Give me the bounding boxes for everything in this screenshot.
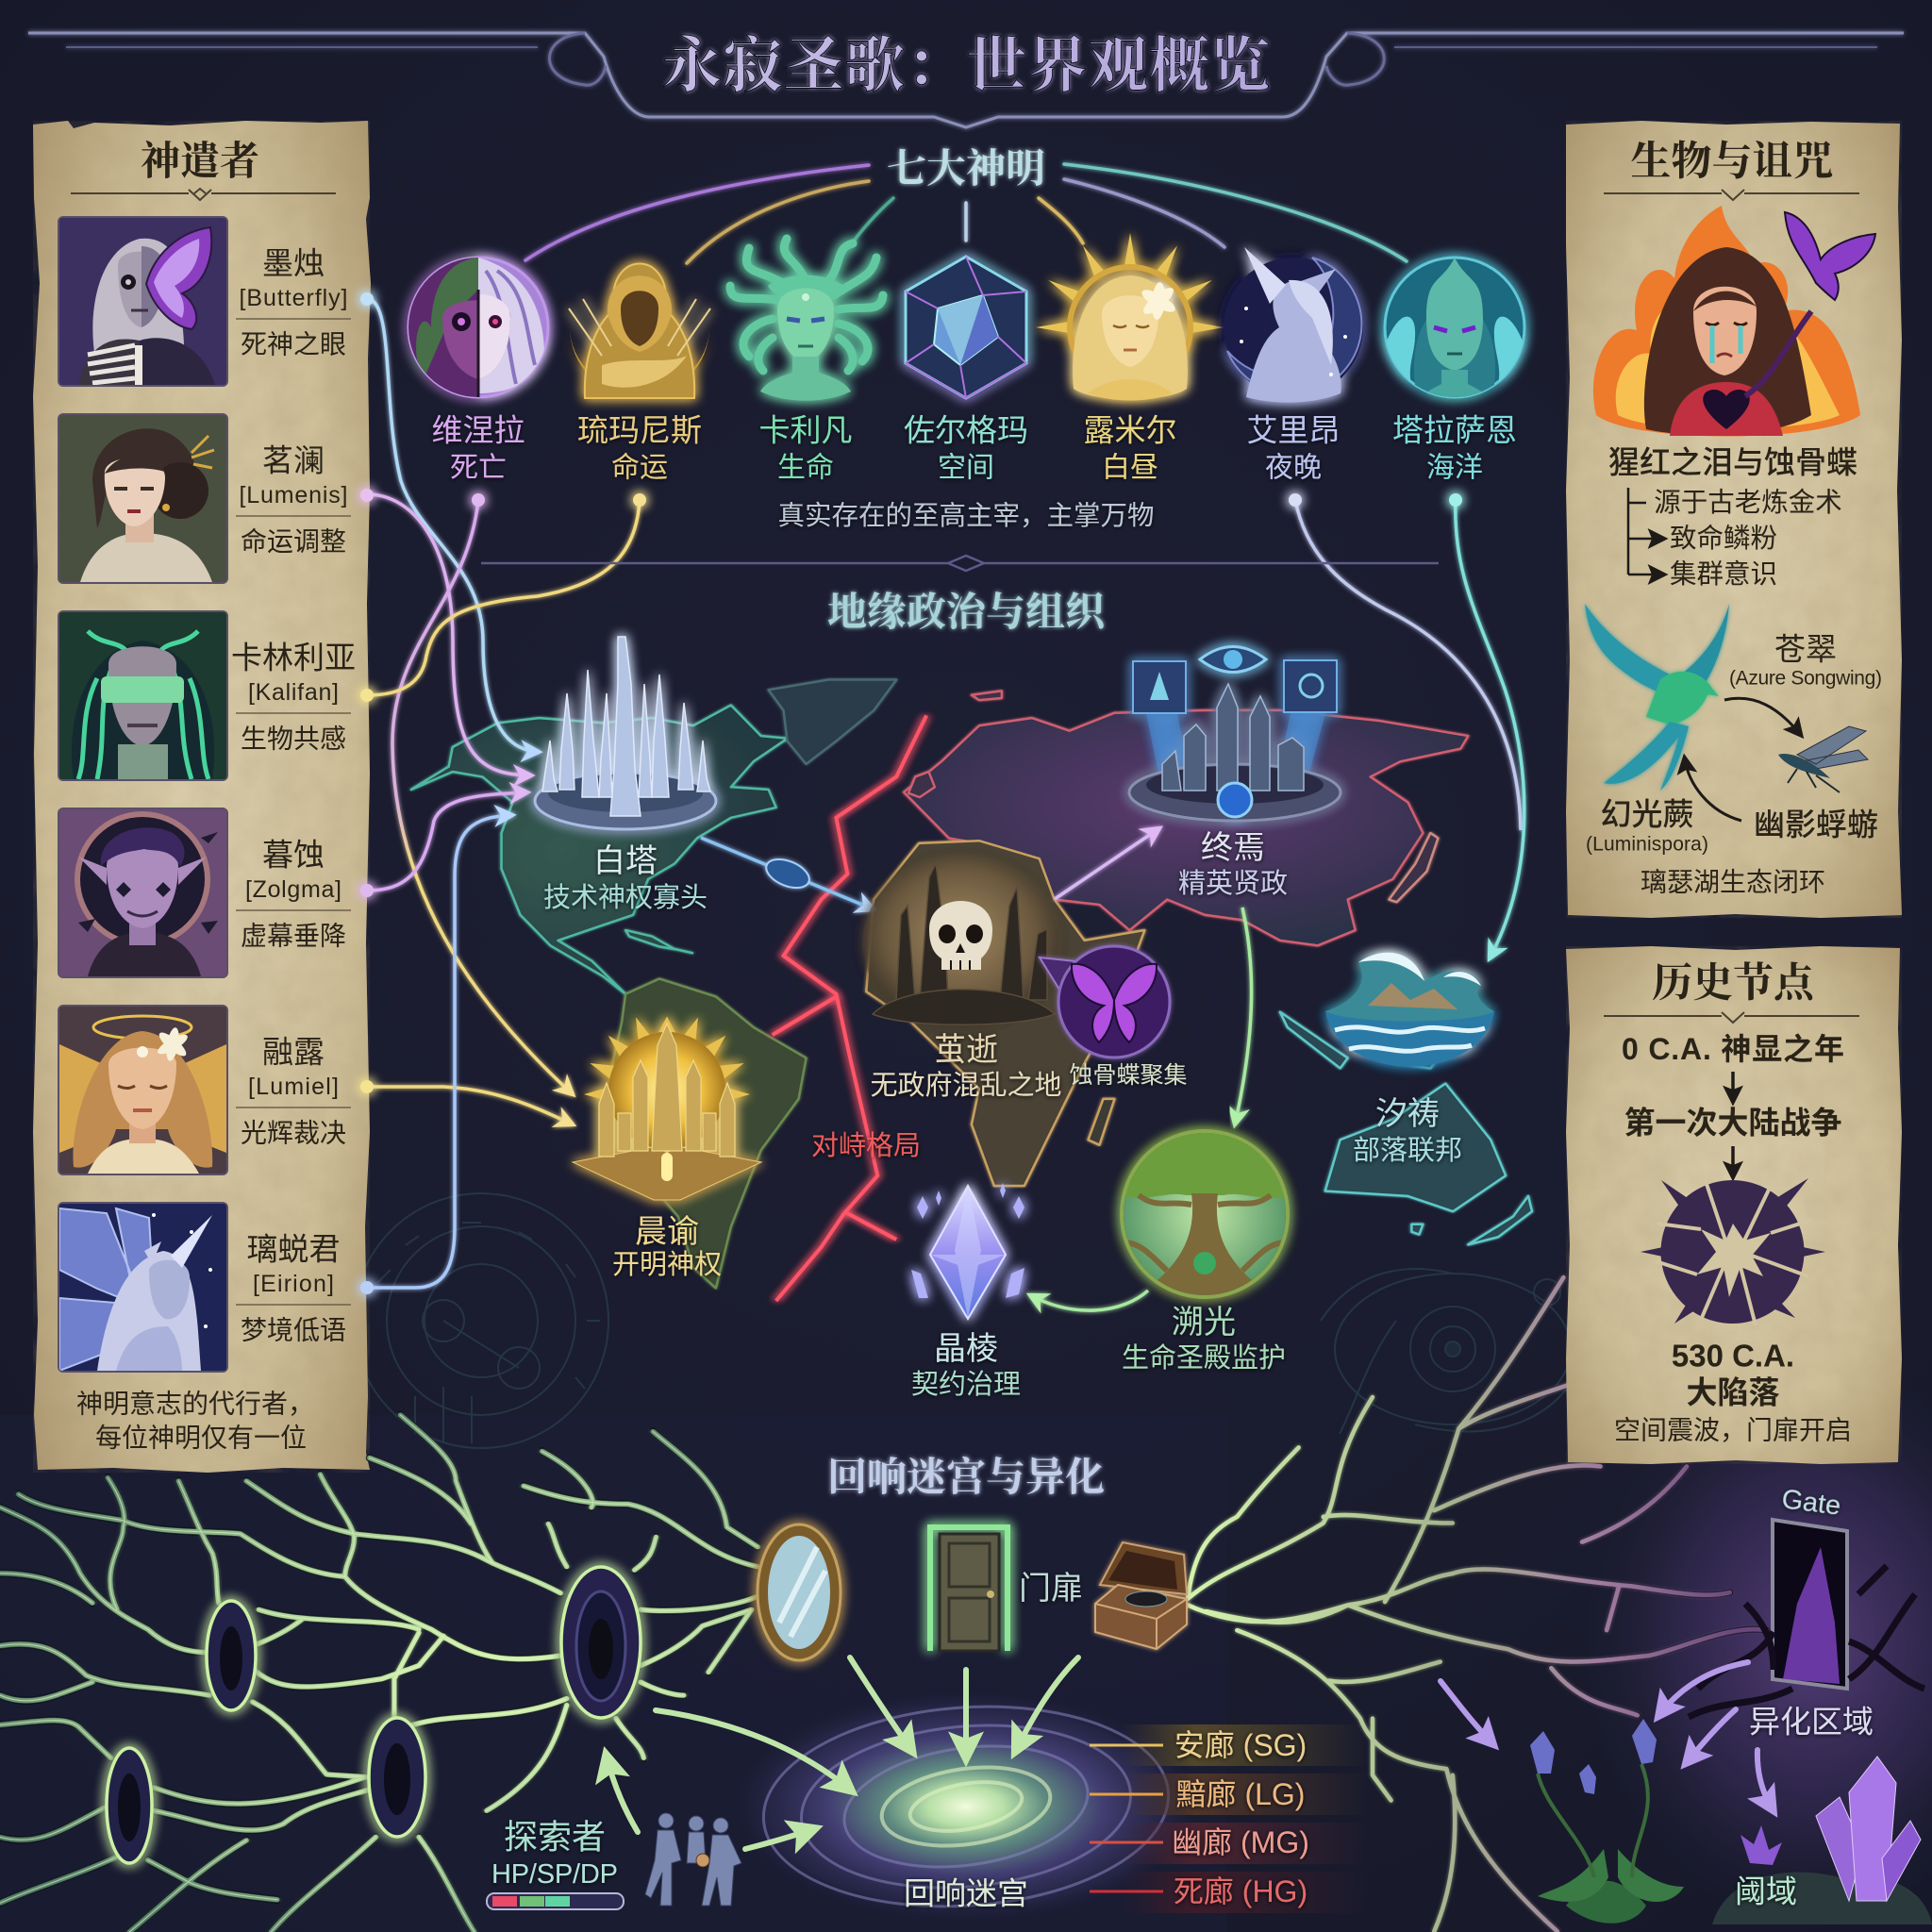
god name: 琉玛尼斯 [577, 413, 702, 447]
god name: 艾里昂 [1247, 413, 1340, 447]
portrait: 融露 [59, 1007, 226, 1174]
callout: butterfly swarm [1040, 946, 1188, 1089]
icon: music box [1095, 1542, 1187, 1649]
label: 幻光蕨 [1586, 796, 1708, 855]
label: confrontation: 对峙格局 [811, 1130, 921, 1161]
heading divider [1604, 1012, 1859, 1023]
medallion [569, 264, 710, 398]
event: 530 C.A. fall: 530 C.A. [1672, 1338, 1794, 1374]
level: 安廊: 安廊 (SG) [1174, 1728, 1307, 1762]
curse traits: 致命鳞粉 [1670, 524, 1777, 554]
faction name: 茧逝 [934, 1032, 998, 1068]
envoy ability: 生物共感 [241, 724, 346, 753]
envoy alias: [Eirion] [253, 1271, 334, 1297]
title: 永寂圣歌：世界观概览 [662, 32, 1270, 100]
event: 530 C.A. fall: 大陷落 [1687, 1375, 1779, 1409]
tree connector [1628, 488, 1662, 575]
heading: seven gods: 七大神明 [887, 147, 1045, 192]
card: 墨烛 [59, 218, 351, 385]
faction subtitle: 无政府混乱之地 [870, 1070, 1062, 1101]
caption: 璃瑟湖生态闭环 [1641, 868, 1825, 896]
illustration: azure bird [1585, 604, 1729, 791]
envoy alias: [Kalifan] [248, 679, 339, 706]
curse traits [1654, 488, 1842, 590]
gate: anomaly doorway [1689, 1484, 1924, 1717]
god: 维涅拉 [408, 258, 548, 483]
faction: 汐祷 [1325, 953, 1494, 1166]
curse traits: 源于古老炼金术 [1654, 488, 1842, 518]
map land masses [411, 679, 1532, 1288]
label: explorers: 探索者 [504, 1817, 606, 1857]
parchment [1566, 946, 1902, 1464]
faction name: 终焉 [1201, 830, 1265, 866]
parchment [33, 121, 371, 1473]
faction name: 溯光 [1172, 1305, 1236, 1341]
curse traits: 集群意识 [1670, 559, 1777, 590]
icon: hologram city [1129, 647, 1341, 821]
label: 苍翠: (Azure Songwing) [1729, 668, 1882, 689]
card: 暮蚀 [59, 809, 351, 976]
subheading: 猩红之泪与蚀骨蝶 [1608, 445, 1857, 479]
portrait: 墨烛 [59, 218, 226, 385]
faction subtitle: 开明神权 [612, 1249, 722, 1280]
faction: 溯光 [1120, 1131, 1290, 1374]
connector dots [360, 292, 1462, 1294]
envoy ability: 梦境低语 [241, 1315, 346, 1345]
faction subtitle: 生命圣殿监护 [1122, 1342, 1286, 1374]
parchment [1566, 121, 1902, 918]
arrow: 白塔 to 茧逝 [701, 838, 874, 909]
heading: geopolitics: 地缘政治与组织 [827, 591, 1108, 635]
level: 黯廊 [1090, 1774, 1368, 1815]
icon: mirror [758, 1524, 841, 1660]
corridor levels [1090, 1724, 1368, 1913]
icon: tree of life [1120, 1131, 1290, 1299]
gods caption: 真实存在的至高主宰，主掌万物 [777, 501, 1155, 531]
god name: 卡利凡 [758, 413, 853, 447]
level: 幽廊: 幽廊 (MG) [1172, 1825, 1309, 1859]
medallion [408, 258, 548, 398]
portal: lower left [107, 1748, 152, 1863]
envoy name: 卡林利亚 [231, 640, 356, 675]
god domain: 空间 [938, 453, 994, 483]
faction: 晶棱 [911, 1183, 1024, 1400]
panel: creatures and curses (生物与诅咒) [1566, 121, 1902, 918]
arrow: 溯光 to 晶棱 [1030, 1291, 1148, 1310]
arrows: ecosystem cycle [1685, 698, 1800, 821]
envoy ability: 光辉裁决 [241, 1119, 346, 1147]
faction: 白塔 [535, 637, 716, 913]
god: 卡利凡 [730, 239, 883, 483]
faction: 晨谕 [573, 1014, 761, 1280]
label: 苍翠 [1729, 632, 1882, 689]
god: 艾里昂 [1224, 247, 1363, 483]
envoy alias: [Zolgma] [245, 876, 341, 903]
label: door: 门扉 [1019, 1571, 1083, 1607]
heading: 神遣者 [141, 140, 259, 184]
icon: explorer party [645, 1813, 741, 1906]
event: first continental war: 第一次大陆战争 [1624, 1106, 1841, 1140]
title frame ornament [28, 33, 1904, 127]
level: 黯廊: 黯廊 (LG) [1176, 1777, 1305, 1811]
god domain: 夜晚 [1265, 453, 1322, 483]
medallion [730, 239, 883, 401]
faction subtitle: 部落联邦 [1353, 1135, 1462, 1166]
god: 塔拉萨恩 [1385, 258, 1524, 483]
icon: mutated crystals [1712, 1757, 1932, 1924]
label: 幽影蜉蝣: 幽影蜉蝣 [1754, 808, 1878, 841]
panel: envoys (神遣者) [33, 121, 371, 1473]
heading: 生物与诅咒 [1630, 140, 1834, 185]
god name: 露米尔 [1083, 413, 1177, 447]
medallion [906, 257, 1026, 398]
connectors: envoys to factions [367, 299, 1524, 1288]
icon: sun city on book [573, 1014, 761, 1200]
icon: white tower city [535, 637, 716, 829]
icon: butterfly bubble [1040, 946, 1170, 1058]
illustration: mayfly [1778, 726, 1868, 792]
card: 卡林利亚 [59, 612, 356, 779]
god: 琉玛尼斯 [569, 264, 710, 483]
arrows into vortex [607, 1657, 1078, 1849]
heading: echo labyrinth: 回响迷宫与异化 [827, 1456, 1105, 1500]
vortex: echo labyrinth [730, 1689, 1202, 1924]
envoy ability: 虚幕垂降 [241, 921, 346, 951]
god domain: 生命 [777, 453, 834, 483]
arrow [1731, 1072, 1735, 1100]
label: echo labyrinth: 回响迷宫 [904, 1875, 1028, 1911]
section divider [481, 556, 1439, 571]
envoy alias: [Lumiel] [248, 1074, 339, 1100]
medallion [1385, 258, 1524, 398]
god: 佐尔格玛 [904, 257, 1028, 483]
portal: upper left [207, 1601, 256, 1710]
medallion [1036, 233, 1224, 400]
heading: 历史节点 [1652, 960, 1817, 1006]
envoy name: 暮蚀 [262, 838, 325, 872]
footnote: 神明意志的代行者， [76, 1389, 314, 1419]
portrait: 璃蜕君 [59, 1204, 226, 1371]
cracks: right network [1188, 1277, 1767, 1931]
arrows: anomaly spread [1441, 1662, 1773, 1809]
faction subtitle: 技术神权寡头 [543, 882, 708, 913]
icon: crystal [911, 1183, 1024, 1319]
card: 璃蜕君 [59, 1204, 351, 1371]
icon: anomalous plant [1530, 1719, 1684, 1924]
icon: skull on ruins [862, 858, 1058, 1028]
parchment grain [1566, 121, 1902, 918]
level: 死廊: 死廊 (HG) [1174, 1874, 1307, 1908]
medallion [1224, 247, 1363, 403]
illustration: crying girl in flames [1593, 206, 1875, 436]
background watermark: rune circle [354, 1193, 608, 1448]
envoy name: 茗澜 [262, 443, 325, 477]
faction name: 白塔 [593, 843, 658, 879]
callout label: 蚀骨蝶聚集 [1069, 1062, 1188, 1089]
panel: historical milestones (历史节点) [1566, 946, 1902, 1464]
envoy name: 墨烛 [262, 245, 325, 281]
faction: 茧逝 [862, 858, 1062, 1101]
faction subtitle: 契约治理 [911, 1369, 1021, 1400]
explorers [487, 1813, 741, 1909]
faction name: 汐祷 [1375, 1096, 1440, 1132]
arrow [1731, 1146, 1735, 1175]
level: 死廊 [1090, 1872, 1368, 1913]
portrait: 茗澜 [59, 415, 226, 582]
heading divider [71, 189, 336, 200]
heading divider [1604, 190, 1859, 200]
background watermark: eye [1321, 1269, 1585, 1434]
envoy alias: [Lumenis] [240, 482, 347, 508]
event: 530 C.A. fall [1672, 1338, 1794, 1409]
label: 幻光蕨: 幻光蕨 [1600, 796, 1694, 832]
faction name: 晨谕 [635, 1214, 699, 1250]
label: anomaly zone: 异化区域 [1749, 1704, 1874, 1740]
god name: 佐尔格玛 [904, 413, 1028, 447]
god: 露米尔 [1036, 233, 1224, 483]
icon: door [930, 1527, 1008, 1651]
god domain: 死亡 [450, 453, 507, 483]
label: threshold: 阈域 [1735, 1874, 1797, 1909]
icon: great wave [1325, 953, 1494, 1066]
status bar [487, 1893, 624, 1909]
envoy ability: 死神之眼 [241, 330, 346, 358]
parchment grain [1566, 946, 1902, 1464]
arrow: 终焉 to 溯光 [1235, 908, 1252, 1124]
faction name: 晶棱 [934, 1331, 998, 1367]
god domain: 白昼 [1102, 453, 1158, 483]
portal: lower middle [369, 1718, 425, 1837]
portrait: 卡林利亚 [59, 612, 226, 779]
portrait: 暮蚀 [59, 809, 226, 976]
envoy alias: [Butterfly] [240, 285, 347, 311]
label: 苍翠: 苍翠 [1774, 632, 1837, 666]
caption: 空间震波，门扉开启 [1614, 1415, 1852, 1445]
card: 融露 [59, 1007, 351, 1174]
event: 0 C.A.: 0 C.A. 神显之年 [1622, 1032, 1844, 1066]
label: Gate: Gate [1780, 1484, 1842, 1522]
envoy name: 璃蜕君 [247, 1232, 340, 1266]
level: 幽廊 [1090, 1823, 1368, 1864]
footnote: 每位神明仅有一位 [95, 1423, 307, 1453]
card: 茗澜 [59, 415, 351, 582]
footnote [76, 1389, 314, 1453]
god domain: 海洋 [1426, 453, 1483, 483]
icon: gate [1689, 1520, 1924, 1717]
envoy ability: 命运调整 [241, 526, 346, 557]
icon: shattering [1641, 1178, 1825, 1325]
label: stats: HP/SP/DP [491, 1859, 618, 1890]
level: 安廊 [1090, 1724, 1368, 1766]
god name: 维涅拉 [432, 413, 525, 447]
portals [107, 1567, 641, 1863]
god name: 塔拉萨恩 [1392, 413, 1517, 447]
faction subtitle: 精英贤政 [1178, 868, 1288, 899]
cracks: left network [0, 1415, 758, 1932]
confrontation lightning [773, 715, 926, 1301]
label: 幻光蕨: (Luminispora) [1586, 834, 1708, 855]
portal: large [561, 1567, 641, 1718]
envoy name: 融露 [262, 1034, 325, 1070]
parchment grain [33, 121, 370, 1473]
arcs from heading to gods [525, 164, 1407, 263]
arrow: 茧逝 to 终焉 [1055, 828, 1159, 899]
faction: 终焉 [1129, 647, 1341, 899]
god domain: 命运 [611, 453, 668, 483]
